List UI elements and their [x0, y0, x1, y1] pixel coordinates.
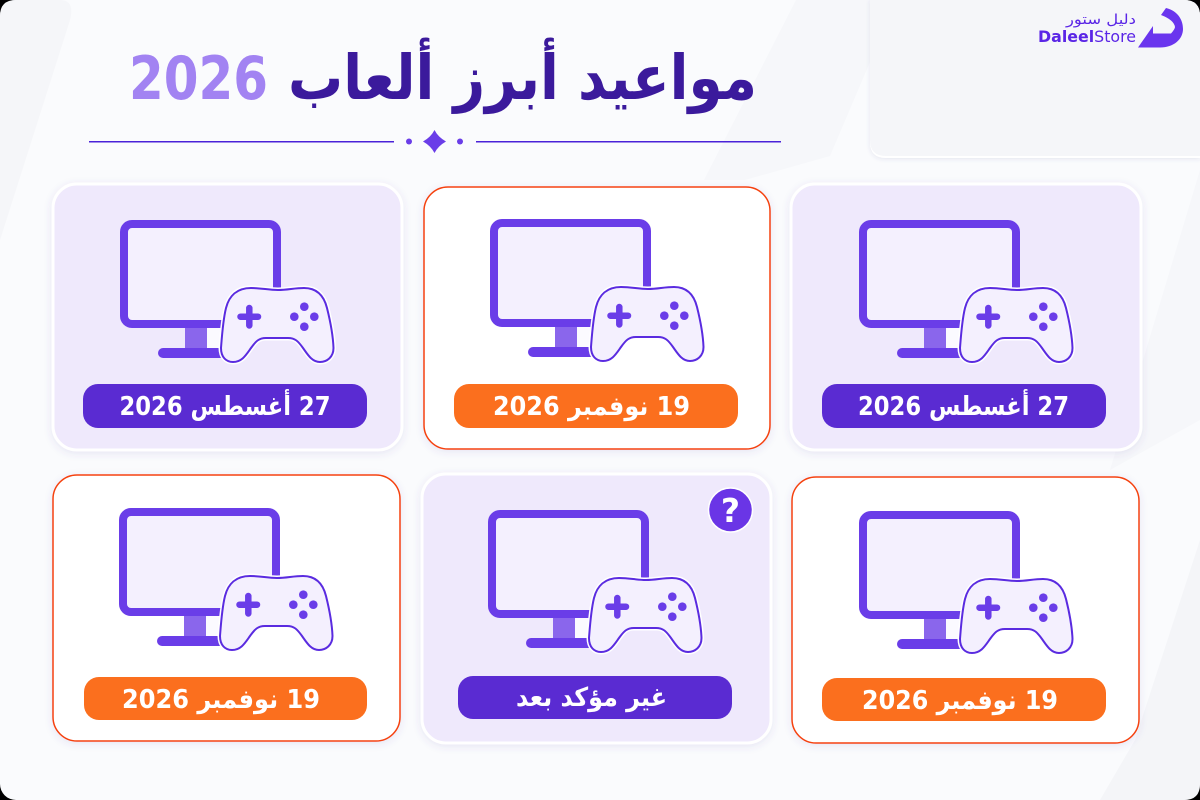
status pill — [458, 676, 732, 719]
panel: bottom middle game card — [422, 474, 771, 743]
date pill: 19 نوفمبر 2026 — [122, 685, 320, 715]
icon: question badge: ? — [721, 491, 740, 530]
logo arabic name: دليل ستور — [1065, 12, 1136, 28]
panel: bottom left game card — [53, 475, 400, 741]
date pill: 27 أغسطس 2026 — [120, 389, 330, 422]
logo latin name: DaleelStore — [1038, 27, 1136, 46]
icon: monitor and controller — [123, 512, 332, 650]
title divider — [89, 130, 781, 153]
date pill — [84, 677, 367, 720]
icon: monitor and controller — [863, 224, 1072, 362]
title words: مواعيد أبرز ألعاب — [288, 37, 757, 114]
date pill: 19 نوفمبر 2026 — [493, 392, 690, 422]
title — [129, 37, 757, 114]
panel: top right game card — [791, 184, 1141, 450]
panel: top middle game card — [424, 187, 770, 449]
date pill — [822, 678, 1106, 721]
icon: monitor and controller — [492, 514, 702, 652]
logo mark — [1138, 8, 1183, 48]
panel: top left game card — [53, 184, 402, 450]
icon: question badge — [708, 488, 752, 532]
date pill — [822, 384, 1106, 428]
icon: monitor and controller — [863, 515, 1072, 653]
date pill — [83, 384, 367, 428]
title year: 2026 — [129, 44, 268, 114]
status pill: غير مؤكد بعد — [516, 683, 667, 713]
icon: monitor and controller — [494, 223, 704, 361]
date pill: 19 نوفمبر 2026 — [862, 686, 1058, 716]
date pill — [454, 384, 738, 428]
panel: bottom right game card — [792, 477, 1139, 743]
logo — [1038, 8, 1183, 48]
icon: monitor and controller — [124, 224, 334, 362]
date pill: 27 أغسطس 2026 — [858, 389, 1069, 422]
